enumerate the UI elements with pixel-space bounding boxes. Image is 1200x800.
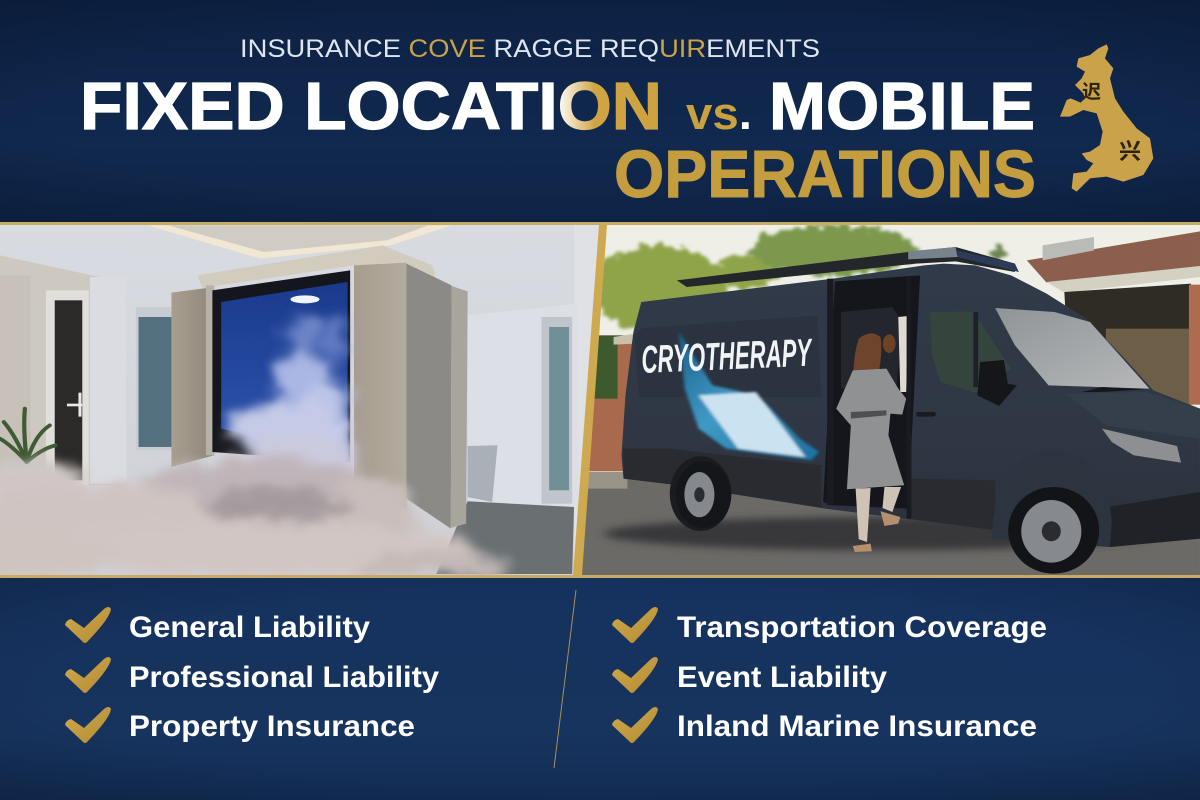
- brick wall and pillar: [588, 334, 635, 471]
- title line one: fixed location vs. mobile: MOBILE: [769, 69, 1035, 144]
- list: mobile operation coverages: [612, 607, 1047, 743]
- subtitle: insurance coverage requirements: INSURANCE COVE RAGGE REQ UIREMENTS: [240, 35, 820, 63]
- item: event liability: Event Liability: [677, 661, 887, 694]
- van side graphic: [677, 332, 820, 462]
- brick building: [1027, 231, 1200, 409]
- open doorway: [823, 275, 920, 509]
- icon: check: [65, 707, 111, 743]
- item: inland marine insurance: Inland Marine Insurance: [677, 710, 1037, 743]
- header background panel: [0, 0, 1200, 223]
- icon: check: [612, 657, 658, 693]
- van shadow: [604, 517, 1157, 550]
- item: professional liability: Professional Liability: [129, 661, 439, 694]
- item: transportation coverage: Transportation Coverage: [677, 611, 1047, 644]
- photo: fixed location cryotherapy chamber: [0, 222, 628, 579]
- gold divider between photos: [573, 225, 607, 575]
- title line one: fixed location vs. mobile: FIXED LOCATION: [80, 69, 662, 144]
- wing mirror: [977, 360, 1017, 406]
- woman: [836, 333, 906, 552]
- gold rule below photos: [0, 575, 1200, 578]
- title line one: fixed location vs. mobile: [80, 69, 1035, 144]
- van wheels: [670, 450, 1112, 574]
- icon: check: [612, 707, 658, 743]
- thin gold divider between lists: [554, 590, 576, 768]
- icon: check: [65, 657, 111, 693]
- icon: gold map of Great Britain: 迟: [1082, 81, 1101, 103]
- title line one: fixed location vs. mobile: vs.: [686, 88, 752, 139]
- footer background panel: [0, 575, 1200, 800]
- door details: [827, 277, 936, 519]
- hood, headlight and bumper: [1102, 408, 1200, 547]
- icon: check: [65, 607, 111, 643]
- cold vapour: [0, 312, 509, 579]
- title line two: operations: OPERATIONS: [614, 137, 1036, 212]
- van lettering: CRYOTHERAPY: [641, 332, 814, 382]
- icon: check: [612, 607, 658, 643]
- gold rule above photos: [0, 222, 1200, 225]
- photo: mobile cryotherapy van: [580, 222, 1200, 578]
- right room with door and cabinet: [436, 304, 578, 574]
- chamber: [171, 245, 468, 529]
- window: [136, 307, 171, 450]
- cab windows: [930, 308, 1149, 393]
- item: general liability: General Liability: [129, 611, 370, 644]
- icon: gold map of Great Britain: [1060, 44, 1153, 192]
- room walls: [0, 222, 628, 578]
- van body: [622, 247, 1200, 547]
- icon: gold map of Great Britain: 兴: [1119, 139, 1141, 164]
- sky and trees: [589, 225, 1200, 472]
- door left: [46, 290, 89, 485]
- pavement: [580, 472, 1200, 578]
- plant: [0, 409, 55, 462]
- list: fixed location coverages: [65, 607, 439, 743]
- item: property insurance: Property Insurance: [129, 710, 415, 743]
